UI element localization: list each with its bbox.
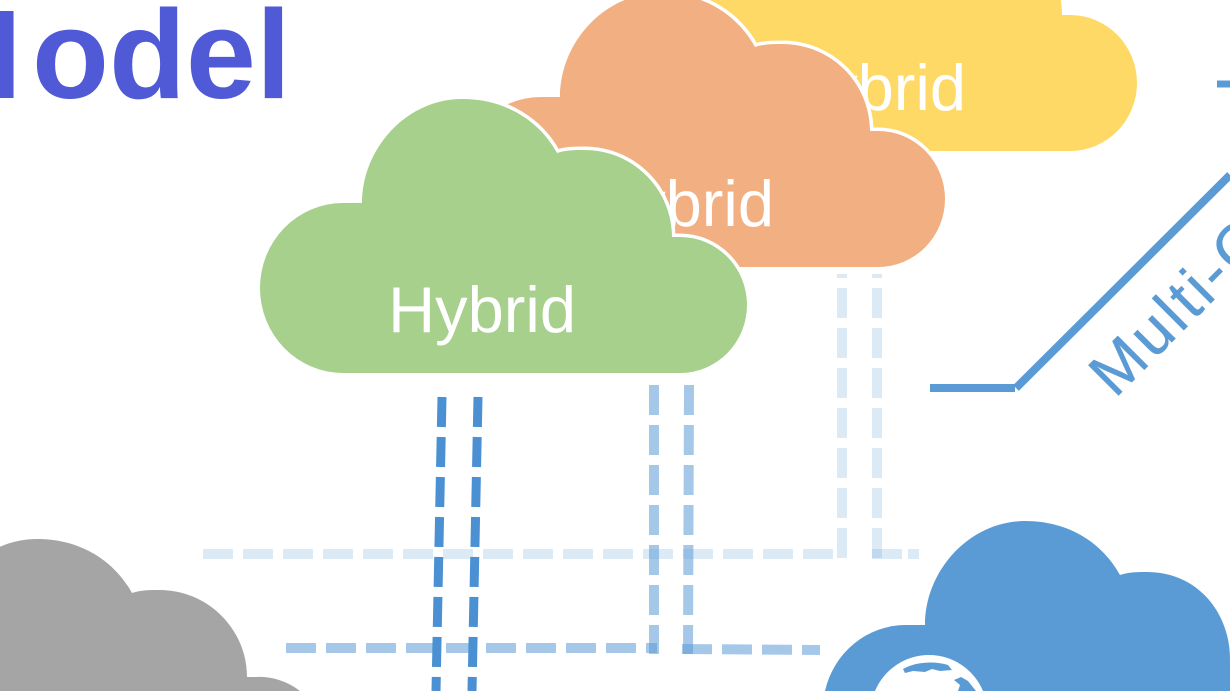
blue cloud with globe (825, 521, 1230, 691)
gray cloud (0, 539, 300, 691)
orange Hybrid cloud (458, 0, 945, 267)
upper dashed connector network (203, 274, 919, 558)
top right connector stub (1217, 80, 1230, 88)
dark dashed connectors from green cloud (436, 397, 478, 691)
lower dashed connector network (286, 385, 820, 654)
yellow Hybrid cloud (650, 0, 1137, 151)
green Hybrid cloud: Hybrid (388, 273, 576, 346)
icon: globe (875, 655, 983, 691)
yellow Hybrid cloud: Hybrid (778, 51, 966, 124)
green Hybrid cloud (260, 99, 747, 373)
orange Hybrid cloud: Hybrid (586, 167, 774, 240)
multi-cloud connector line (930, 175, 1230, 388)
